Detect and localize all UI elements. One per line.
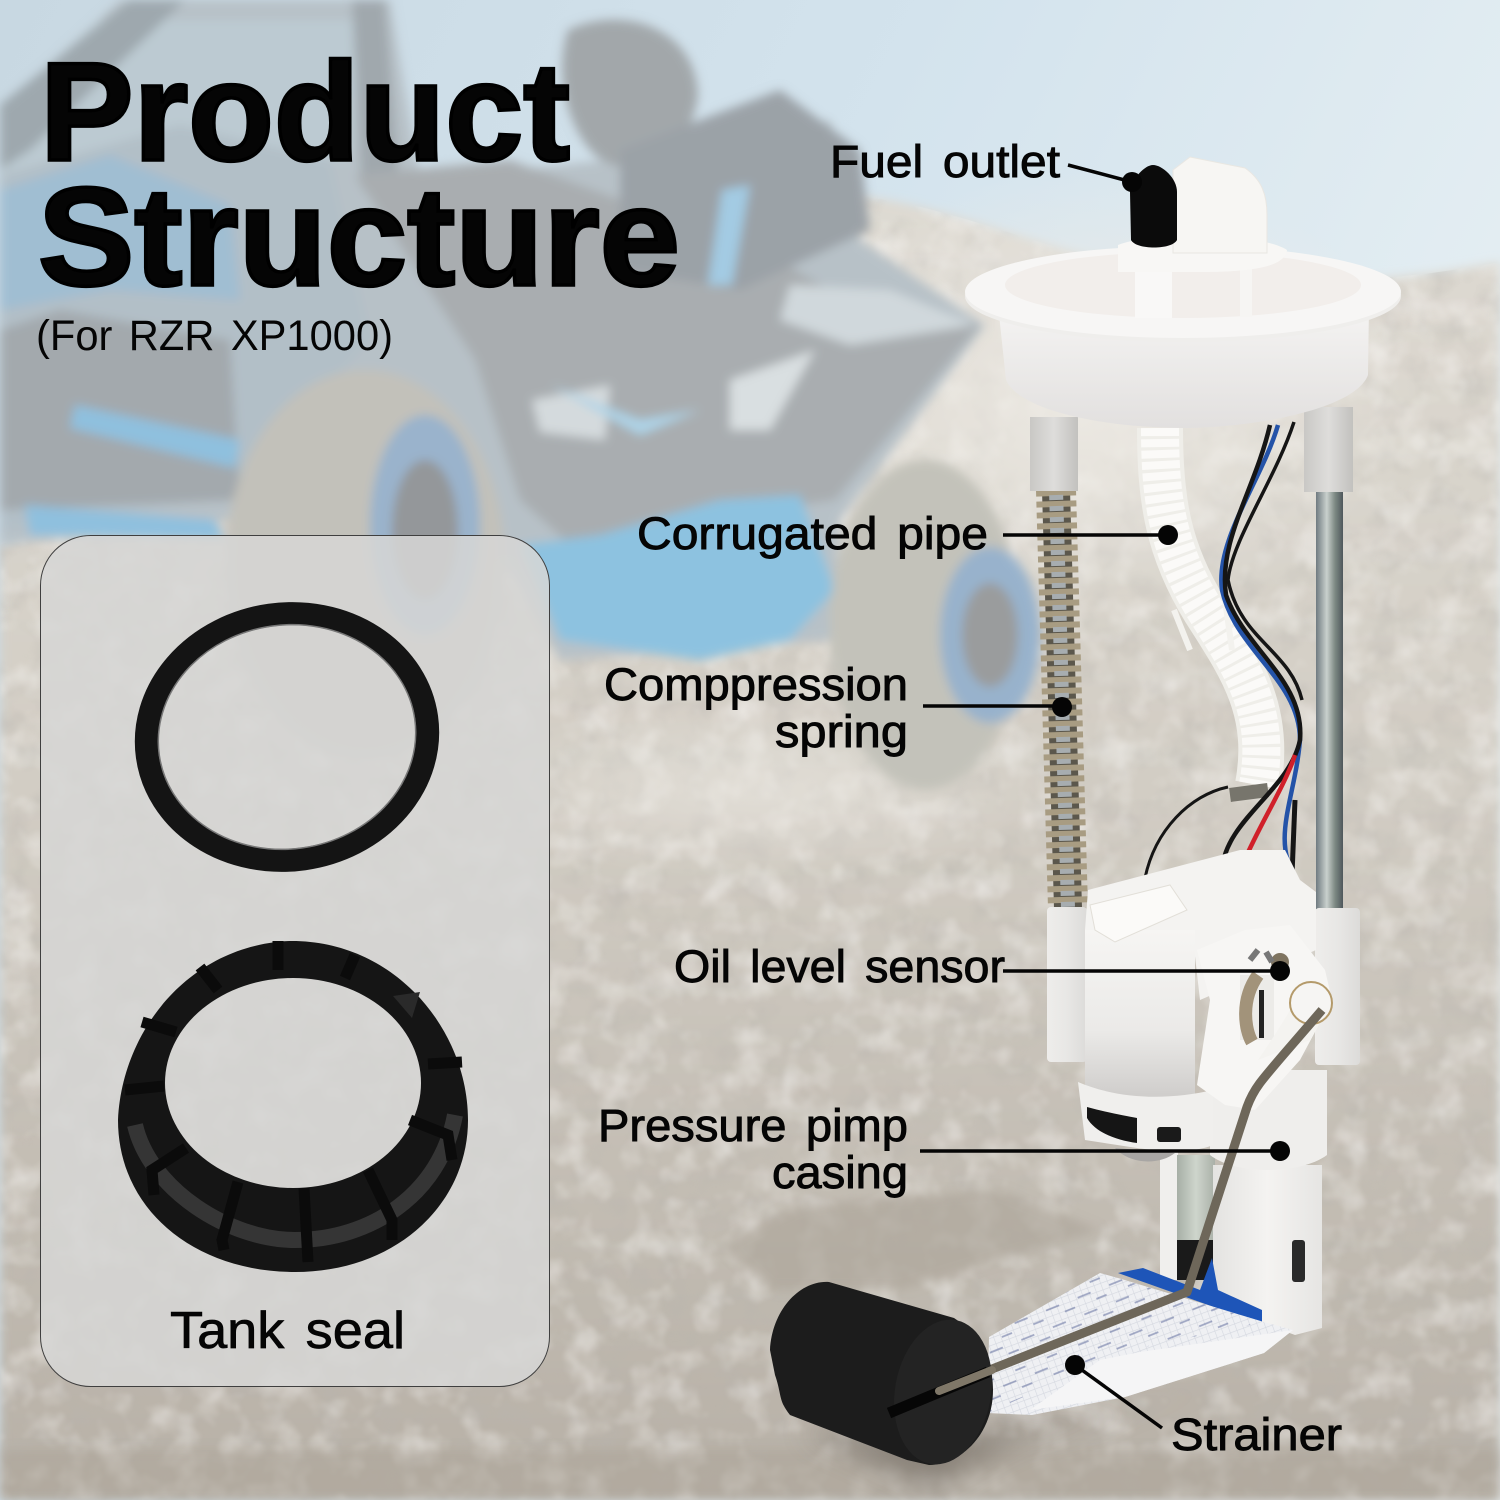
fuel outlet cap [1130,165,1177,248]
callout: pressure pump casing: casing [772,1147,908,1198]
module side legs [1047,907,1360,1065]
callout: oil level sensor: Oil level sensor [674,941,1005,992]
callout: compression spring: spring [775,706,908,757]
callout: pressure pump casing [598,1100,1290,1198]
title [38,33,680,315]
subtitle: (For RZR XP1000) [36,312,393,360]
title: Structure [38,158,680,315]
post and guide rod, right [1304,407,1353,913]
strainer [987,1258,1293,1415]
icon: flat o-ring seal [130,596,444,878]
product: fuel pump assembly [770,157,1401,1490]
fuel outlet bracket [1173,157,1267,253]
flange cup [965,236,1401,428]
callout: oil level sensor [674,941,1290,992]
callout: fuel outlet: Fuel outlet [830,136,1061,187]
pump motor [1160,1150,1215,1280]
float arm [939,1010,1322,1390]
oil level sensor [1197,925,1332,1110]
callout: corrugated pipe: Corrugated pipe [637,508,988,559]
soft shadow under float and strainer [800,1385,1230,1490]
callout: compression spring [604,659,1072,757]
wires [1145,422,1302,945]
corrugated pipe [1160,428,1268,795]
text: tank seal: Tank seal [170,1302,405,1360]
pressure pump casing [1210,1070,1327,1335]
float [770,1282,1003,1472]
callout: pressure pump casing: Pressure pimp [598,1100,908,1151]
panel: tank seal [40,536,550,1386]
callout: fuel outlet [830,136,1142,192]
title: Product [40,33,570,190]
callout: strainer: Strainer [1171,1409,1342,1460]
icon: threaded tank lock ring [118,941,468,1272]
compression spring and post [1030,417,1078,908]
callout: strainer [1065,1355,1342,1460]
callout: corrugated pipe [637,508,1178,559]
sender module body [1078,850,1316,1161]
callout: compression spring: Comppression [604,659,908,710]
